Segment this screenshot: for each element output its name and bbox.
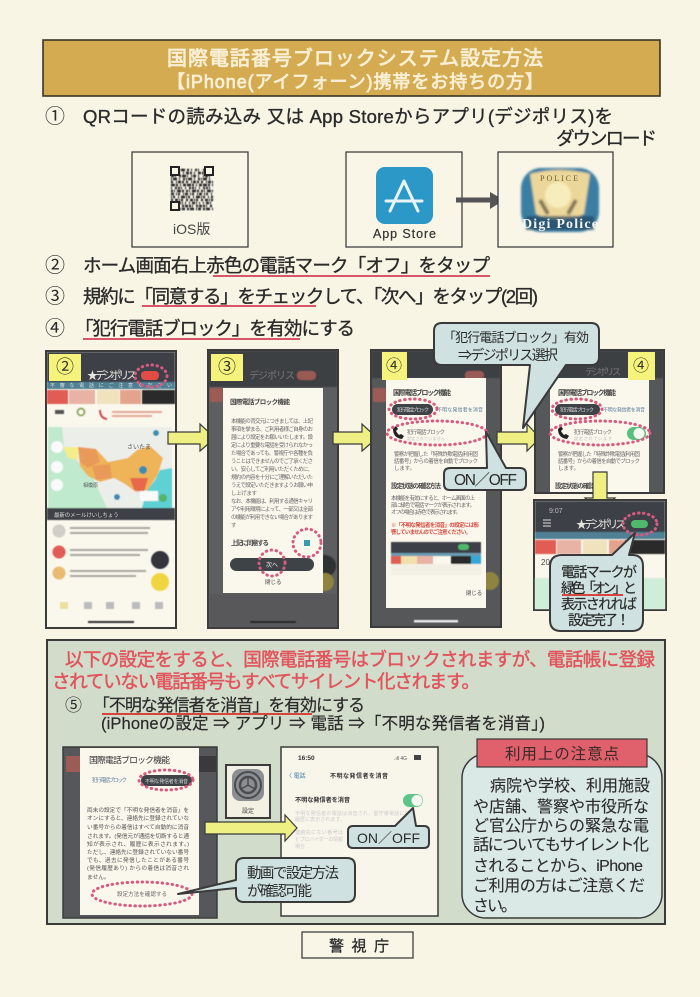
screenshot: step 4 toggle on	[535, 350, 664, 493]
screenshot: iPhone settings toggle: .ıll 4G	[394, 756, 407, 762]
notes text: されることから、iPhone	[473, 857, 643, 875]
screenshot: silence tab: (発信履歴あり) からの着信は消音され	[87, 864, 189, 872]
screenshot: step 4 toggle off: 犯行電話ブロック	[407, 428, 445, 436]
screenshot: step 2 home screen: さいたま	[127, 444, 151, 451]
screenshot: step 3 consent dialog: し上げます	[231, 489, 257, 497]
step 3 text: 規約に「同意する」をチェックして、「次へ」をタップ(2回)	[83, 286, 538, 307]
step 1 text: QRコードの読み込み 又は App Storeからアプリ(デジポリス)を	[83, 106, 613, 127]
Digi Police card: Digi Police	[522, 217, 598, 232]
screenshot: home with green mark	[534, 500, 666, 610]
screenshot: step 4 toggle off: 部に緑色で電話マークが表示されます。	[391, 501, 475, 509]
step 5 text: ⑤	[65, 696, 82, 715]
App Store card	[346, 152, 462, 247]
screenshot: step 4 toggle on: デジポリス	[585, 366, 621, 377]
screenshot: step 4 toggle off: ④	[386, 357, 402, 375]
QR code card: iOS版	[173, 221, 210, 237]
callout: on/off toggle	[444, 432, 526, 490]
footer: issuer	[302, 932, 413, 958]
callout: setup complete	[550, 533, 643, 631]
arrow: step 4 off to on	[497, 424, 540, 451]
screenshot: step 4 toggle on: 不明な発信者を消音	[603, 406, 645, 414]
screenshot: silence tab: でも、過去に発信したことがある番号	[87, 856, 189, 864]
screenshot: silence tab: されます。(発信元が通話を切断すると通	[87, 832, 189, 840]
step 5 text: 「不明な発信者を消音」を有効にする	[93, 696, 365, 715]
screenshot: silence tab: オンにすると、連絡先に登録されていな	[87, 814, 189, 822]
step 3 text: ③	[45, 285, 65, 308]
screenshot: iPhone settings toggle: 不明な発信者を消音	[330, 772, 388, 780]
screenshot: silence tab: 設定方法を確認する	[117, 890, 167, 898]
notes text: 病院や学校、利用施設	[490, 777, 650, 795]
screenshot: iPhone settings toggle: 〈 電話	[286, 773, 306, 780]
screenshot: step 3 consent dialog: デジポリス	[249, 369, 295, 382]
screenshot: step 4 toggle on: 話番号」からの着信を自動でブロック	[558, 457, 640, 465]
step 2 text: ホーム画面右上赤色の電話マーク「オフ」をタップ	[83, 255, 490, 276]
screenshot: step 4 toggle off: 設定されていません	[407, 435, 445, 441]
screenshot: silence tab: 不明な発信者を消音	[145, 778, 188, 785]
callout: on/off: ON／OFF	[357, 830, 420, 846]
screenshot: silence tab: い番号からの着信はすべて自動的に消音	[87, 823, 189, 831]
step 4 text: 「犯行電話ブロック」を有効にする	[75, 318, 355, 339]
step 1 text	[45, 105, 657, 149]
screenshot: step 3 consent dialog: うことはできませんのでご了承くださ	[231, 457, 313, 465]
icon: iPhone settings: 設定	[242, 807, 254, 815]
screenshot: step 3 consent dialog: 規約の内容を十分にご理解いただいた	[231, 473, 313, 481]
screenshot: iPhone settings toggle: 場合	[295, 843, 305, 850]
step 4 text: ④	[45, 317, 65, 340]
screenshot: step 4 toggle on: 設定状態の確認	[555, 481, 596, 490]
screenshot: iPhone settings toggle: 履歴に表示されます。	[295, 816, 345, 823]
screenshot: step 3 consent dialog: ③	[218, 357, 236, 377]
screenshot: step 2 home screen: ②	[56, 357, 74, 377]
screenshot: step 3 consent dialog	[208, 350, 338, 628]
warning text: 以下の設定をすると、国際電話番号はブロックされますが、電話帳に登録	[65, 649, 655, 670]
screenshot: silence tab: 国際電話ブロック機能	[89, 754, 170, 765]
screenshot: step 3 consent dialog: 閉じる	[265, 579, 282, 586]
screenshot: step 4 toggle off: 警察が把握した「特殊詐欺電話(利用固	[394, 450, 478, 458]
screenshot: silence tab	[63, 747, 217, 918]
icon: iPhone settings	[226, 765, 270, 818]
screenshot: home with green mark: 9:07	[549, 508, 563, 515]
screenshot: step 3 consent dialog: 上記に同意する	[231, 538, 269, 547]
screenshot: step 4 toggle on: 警察が把握した「特殊詐欺電話(利用固	[558, 450, 640, 458]
title banner: 【iPhone(アイフォーン)携帯をお持ちの方】	[167, 72, 543, 92]
screenshot: step 4 toggle on: 犯行電話ブロック	[574, 428, 612, 436]
screenshot: iPhone settings toggle: 不明な発信者を消音	[295, 796, 350, 804]
callout: video guide	[178, 858, 355, 902]
screenshot: step 3 consent dialog: うえで設定いただきますようお願い申	[231, 481, 313, 489]
Digi Police card: POLICE	[540, 174, 578, 183]
screenshot: step 2 home screen	[46, 351, 176, 628]
screenshot: step 2 home screen: ★デジポリス	[87, 368, 137, 382]
screenshot: step 3 consent dialog: 本機能の背交元につきましては、上記	[231, 417, 314, 425]
screenshot: silence tab: 両未の設定で「不明な発信者を消音」を	[87, 806, 189, 814]
screenshot: step 4 toggle off: ※「不明な発信者を消音」の設定には影	[391, 521, 480, 529]
App Store card: App Store	[373, 227, 436, 241]
title banner	[43, 40, 660, 96]
screenshot: step 4 toggle off: 設定状態の確認方法	[391, 481, 442, 490]
screenshot: step 4 toggle on: 設定されています	[574, 435, 612, 441]
panel: silence unknown callers	[47, 640, 665, 924]
step 5 text: (iPhoneの設定 ⇒ アプリ ⇒ 電話 ⇒「不明な発信者を消音」)	[101, 714, 545, 733]
notes text: 話についてもサイレント化	[473, 836, 649, 854]
screenshot: step 3 consent dialog: た場合であっても、警視庁や各種を負	[231, 449, 314, 457]
notes panel	[462, 739, 662, 918]
callout: setup complete: 電話マークが	[561, 564, 637, 580]
step 5 text	[65, 696, 545, 733]
screenshot: iPhone settings toggle: 不明な発信者の電話は消音され、留守番電話に送ら	[295, 810, 415, 817]
screenshot: iPhone settings toggle: 連絡先にない番号は	[295, 829, 343, 836]
screenshot: step 4 toggle off: します。	[394, 465, 415, 472]
screenshot: step 3 consent dialog: す	[231, 522, 236, 529]
screenshot: silence tab: 知が表示され、履歴に表示されます。)	[87, 840, 189, 848]
screenshot: home with green mark: 20	[541, 558, 550, 567]
screenshot: silence tab: 犯行電話ブロック	[92, 776, 127, 784]
screenshot: step 3 consent dialog: い。安心してご利用いただくために、	[231, 465, 313, 473]
warning text	[52, 649, 655, 692]
screenshot: step 3 consent dialog: 事項を挙まる、ご利用者様ご自身のお	[231, 425, 314, 433]
screenshot: step 4 toggle off: 不明な発信者を消音	[437, 406, 483, 414]
screenshot: step 3 consent dialog: の機能が利用できない場合があります	[231, 513, 313, 521]
callout: on/off toggle: ON／OFF	[454, 472, 517, 489]
screenshot: iPhone settings toggle: とプロバイダーの情報	[295, 836, 343, 843]
step 2 text: ②	[45, 254, 65, 277]
notes text	[473, 777, 650, 915]
screenshot: step 4 toggle off: 閉じる	[466, 590, 482, 597]
screenshot: step 4 toggle on: ④	[633, 357, 649, 375]
arrow: down to result	[585, 472, 615, 514]
step 1 text: ①	[45, 105, 65, 128]
notes text: さい。	[473, 897, 517, 915]
arrow: step 2 to 3	[168, 424, 215, 451]
screenshot: step 3 consent dialog: なお、本機能は、利用する通信キャリ	[231, 497, 313, 505]
screenshot: home with green mark: ★デジポリス	[576, 517, 626, 531]
notes heading	[477, 739, 647, 767]
arrow: app store to Digi Police	[456, 192, 504, 209]
screenshot: step 2 home screen: 相模原	[83, 482, 98, 489]
screenshot: silence tab: ません。	[87, 874, 110, 881]
notes heading: 利用上の注意点	[505, 745, 619, 763]
footer: issuer: 警 視 庁	[329, 938, 389, 955]
screenshot: step 4 toggle off: オフの場合は赤色で表示されます。	[391, 508, 461, 516]
screenshot: iPhone settings toggle: 16:50	[298, 755, 315, 762]
screenshot: step 3 consent dialog: 定により重要な電話を受けられなかっ	[231, 441, 313, 449]
callout: video guide: 動画で設定方法	[247, 865, 340, 882]
screenshot: step 3 consent dialog: 次へ	[266, 561, 278, 569]
screenshot: step 4 toggle on: します。	[558, 465, 579, 472]
warning text: されていない電話番号もすべてサイレント化されます。	[52, 671, 480, 692]
notes text: や店舗、警察や市役所な	[473, 798, 649, 816]
screenshot: step 4 toggle on: 国際電話ブロック機能	[558, 388, 616, 397]
screenshot: step 4 toggle off: 話番号」からの着信を自動でブロック	[394, 457, 478, 465]
step 1 text: ダウンロード	[556, 128, 657, 149]
screenshot: step 4 toggle on: 犯行電話ブロック	[560, 406, 594, 414]
notes text: ど官公庁からの緊急な電	[473, 816, 649, 835]
screenshot: step 4 toggle off: 犯行電話ブロック	[397, 406, 429, 414]
arrow: to iPhone settings	[205, 815, 297, 841]
screenshot: step 3 consent dialog: 国際電話ブロック機能	[230, 397, 290, 406]
arrow: step 3 to 4	[333, 424, 377, 451]
callout: select Digi Police	[434, 323, 599, 428]
screenshot: step 3 consent dialog: アや利用環境によって、一部又は全部	[231, 505, 314, 513]
callout: setup complete: 表示されれば	[561, 596, 637, 612]
screenshot: step 3 consent dialog: 届により設定をお願いいたします。設	[231, 434, 314, 441]
screenshot: step 4 toggle off: 響していませんのでご注意ください。	[391, 528, 471, 536]
callout: select Digi Police: ⇒デジポリス選択	[458, 347, 558, 363]
screenshot: step 4 toggle off: 国際電話ブロック機能	[393, 388, 451, 397]
callout: video guide: が確認可能	[247, 883, 312, 900]
screenshot: iPhone settings toggle	[281, 747, 438, 916]
callout: setup complete: 緑色「オン」と	[561, 580, 637, 596]
callout: select Digi Police: 「犯行電話ブロック」有効	[443, 330, 589, 345]
screenshot: step 2 home screen: 不審な電話にご注意ください	[50, 382, 172, 389]
QR code card	[132, 152, 248, 247]
notes text: ご利用の方はご注意くだ	[473, 877, 645, 895]
title banner: 国際電話番号ブロックシステム設定方法	[167, 46, 543, 70]
screenshot: step 4 toggle off: 本機能を有効にすると、ホーム画面の上	[391, 494, 476, 502]
screenshot: step 2 home screen: 最新のメールけいしちょう	[54, 511, 119, 519]
callout: on/off	[348, 808, 429, 848]
Digi Police card	[498, 152, 613, 247]
screenshot: silence tab: ただし、連絡先に登録されていない番号	[87, 848, 189, 856]
screenshot: step 4 toggle off	[371, 350, 501, 627]
callout: setup complete: 設定完了！	[568, 612, 630, 628]
